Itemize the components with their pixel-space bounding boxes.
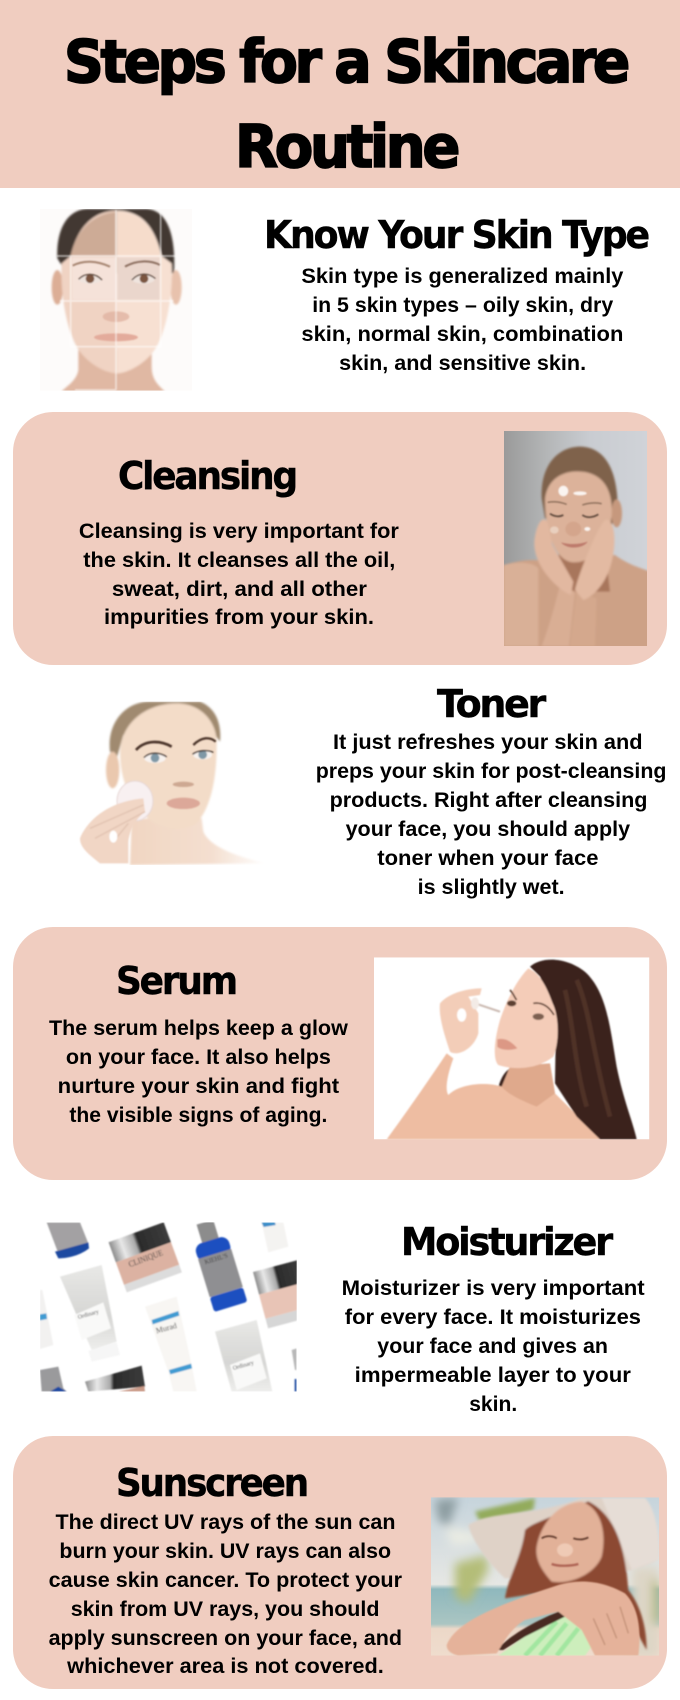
text: serum description [49,1016,348,1127]
panel: sunscreen [13,1436,667,1689]
text: skin type description: skin, normal skin, combination [301,322,623,346]
text: moisturizer description: Moisturizer is very important [342,1276,645,1300]
heading: toner: Toner [437,682,546,727]
text: sunscreen description: cause skin cancer. To protect your [49,1568,403,1592]
text: moisturizer description: impermeable layer to your [355,1363,632,1387]
photo: moisturizer products: CLINIQUE [127,1247,164,1269]
text: cleansing description: the skin. It cleanses all the oil, [83,548,395,572]
heading: serum: Serum [116,959,236,1004]
title: Routine [235,112,458,181]
text: sunscreen description: whichever area is not covered. [66,1654,384,1678]
text: cleansing description: impurities from your skin. [104,605,374,629]
text: toner description: preps your skin for post-cleansing [316,759,666,783]
photo: woman using cotton pad [80,702,267,865]
text: skin type description: in 5 skin types – oily skin, dry [312,293,613,317]
panel: cleansing [13,412,667,665]
photo: woman in hat applying sunscreen [431,1497,659,1657]
photo: woman applying cleanser [504,431,647,646]
title [64,27,628,181]
text: moisturizer description: your face and gives an [377,1334,608,1358]
photo: woman applying serum [374,957,649,1139]
text: sunscreen description: apply sunscreen on your face, and [49,1626,402,1650]
section: moisturizer [40,1217,645,1416]
photo: moisturizer products: KIEHL'S [204,1252,229,1266]
text: skin type description: Skin type is generalized mainly [301,264,623,288]
title: Steps for a Skincare [64,27,628,96]
heading: sunscreen: Sunscreen [116,1461,307,1506]
photo: face with skin zones grid [50,209,184,391]
text: skin type description [301,264,623,375]
heading: moisturizer: Moisturizer [401,1220,613,1265]
text: cleansing description [79,519,400,629]
text: moisturizer description: skin. [469,1392,517,1416]
text: cleansing description: Cleansing is very important for [79,519,400,543]
text: serum description: nurture your skin and fight [58,1074,339,1098]
text: sunscreen description: skin from UV rays, you should [71,1597,379,1621]
text: sunscreen description: burn your skin. UV rays can also [59,1539,391,1563]
photo: moisturizer products: Ordinary [77,1309,100,1321]
section: know your skin type [40,209,649,392]
text: moisturizer description: for every face. It moisturizes [345,1305,641,1329]
section: toner [80,682,667,899]
photo: moisturizer products: Ordinary [232,1360,255,1372]
text: cleansing description: sweat, dirt, and all other [112,577,368,601]
text: toner description: It just refreshes your skin and [333,730,643,754]
photo: moisturizer products: Murad [155,1321,178,1335]
text: toner description: your face, you should apply [346,817,630,841]
text: serum description: on your face. It also helps [66,1045,331,1069]
text: serum description: The serum helps keep a glow [49,1016,348,1040]
text: skin type description: skin, and sensitive skin. [339,351,586,375]
text: moisturizer description [342,1276,645,1416]
text: serum description: the visible signs of aging. [69,1103,327,1127]
photo: moisturizer products [40,1217,313,1392]
header banner [0,0,680,188]
text: toner description: is slightly wet. [418,875,565,899]
text: toner description: toner when your face [377,846,599,870]
text: sunscreen description [49,1510,403,1678]
heading: cleansing: Cleansing [118,454,296,499]
text: sunscreen description: The direct UV rays of the sun can [56,1510,396,1534]
text: toner description [316,730,666,899]
text: toner description: products. Right after cleansing [330,788,648,812]
heading: know your skin type: Know Your Skin Type [264,213,649,258]
panel: serum [13,927,667,1180]
